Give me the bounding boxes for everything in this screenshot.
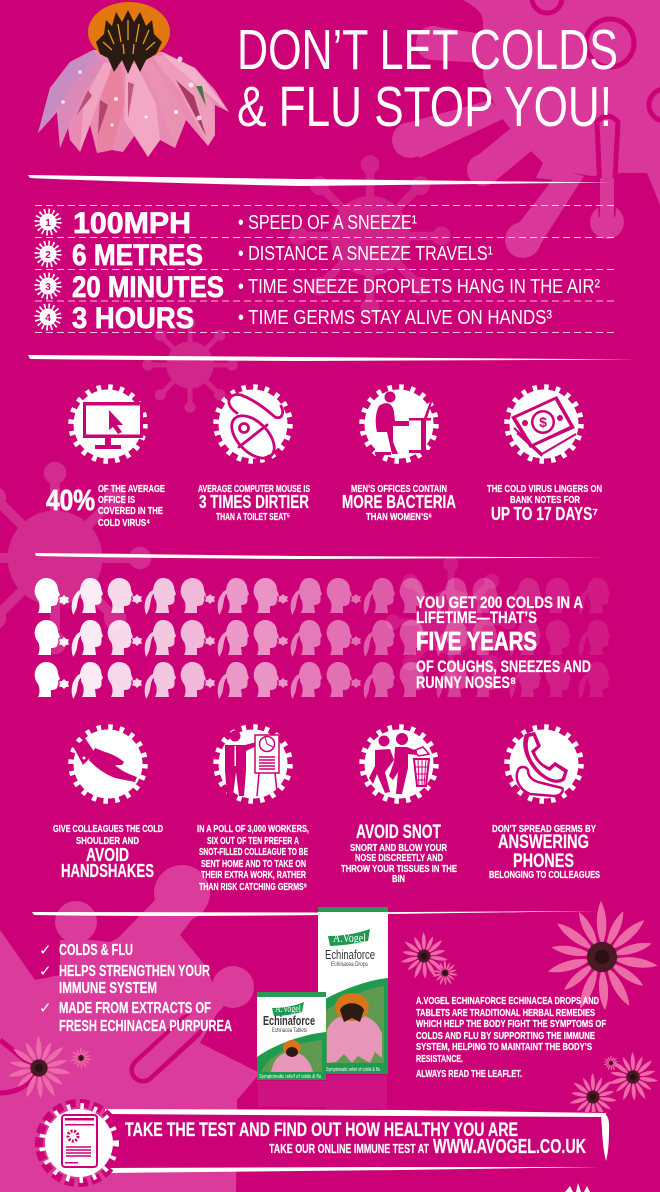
stat: 100mph [37,207,417,240]
hero flower illustration [38,2,229,157]
fact: mouse: THAN A TOILET SEAT⁵ [216,512,290,523]
checklist benefits: ✓ [39,963,52,980]
advice: avoid snot [341,822,457,885]
banner panel [105,1112,605,1168]
flower cone [88,2,170,74]
text: 200 colds in a lifetime: YOU GET 200 COLDS IN A [416,593,583,612]
fact: mouse [198,484,310,523]
fact: bank notes [487,484,602,524]
fact: bank notes: THE COLD VIRUS LINGERS ON [487,484,602,495]
advice: avoid snot: THROW YOUR TISSUES IN THE [341,864,457,875]
product packs [257,907,388,1109]
title [237,18,618,139]
stat: 3 hours [37,302,552,335]
checklist benefits: HELPS STRENGTHEN YOUR [59,963,210,980]
advice: answering phones [489,824,600,881]
advice: poll of workers: SNOT-FILLED COLLEAGUE TO BE [199,847,308,858]
fact: bacteria: THAN WOMEN’S⁶ [366,512,432,523]
large virus top right [392,0,660,258]
rings on top right virus [532,0,660,121]
stat: 20 minutes [37,271,600,304]
fact: bacteria: MEN’S OFFICES CONTAIN [351,484,447,495]
stat: 6 metres [37,239,493,272]
icon: cold shoulder hand [71,727,145,801]
small virus at bottom edge [565,1183,590,1192]
advice: avoid snot: AVOID SNOT [356,822,441,843]
fact: bacteria: MORE BACTERIA [342,492,456,512]
stat: 6 metres: 6 METRES [72,239,203,272]
advice: avoid handshakes [53,824,163,881]
advice: avoid snot: SNORT AND BLOW YOUR [350,843,448,854]
product description: A.VOGEL ECHINAFORCE ECHINACEA DROPS AND [416,996,599,1007]
fact: 40 percent: OF THE AVERAGE [98,484,165,495]
stat: 20 minutes: 20 MINUTES [72,271,224,304]
advice: poll of workers: IN A POLL OF 3,000 WORKERS, [197,824,309,835]
icon: presenter [216,727,290,801]
checklist benefits [39,942,232,1035]
advice: answering phones: DON’T SPREAD GERMS BY [492,824,596,835]
text: 200 colds in a lifetime: LIFETIME—THAT’S [416,608,537,627]
icon: computer monitor [71,387,145,461]
advice: poll of workers: SENT HOME AND TO TAKE ON [201,859,306,870]
fact: mouse: AVERAGE COMPUTER MOUSE IS [198,484,310,495]
fact: 40 percent: OFFICE IS [98,495,135,506]
divider stroke [35,553,606,559]
product: Echinaforce tablets box: Echinaforce [263,1013,315,1028]
product: Echinaforce drops box: Symptomatic relief of colds & flu [326,1067,380,1073]
fact: 40 percent: 40% [46,485,95,517]
checklist benefits: ✓ [39,942,52,959]
stat: 100mph: 1 [45,218,51,229]
decorative echinacea flowers [7,901,658,1120]
product description: TABLETS ARE TRADITIONAL HERBAL REMEDIES [416,1008,595,1019]
icon: phone test badge [39,1103,119,1183]
icon: telephone [507,727,581,801]
product description: ALWAYS READ THE LEAFLET. [416,1069,522,1080]
text: 200 colds in a lifetime: FIVE YEARS [416,626,537,656]
checklist benefits: COLDS & FLU [59,942,133,959]
text: 200 colds in a lifetime: OF COUGHS, SNEEZES AND [416,657,591,676]
icon: computer mouse [216,387,290,466]
advice: avoid handshakes: SHOULDER AND [76,836,139,847]
fact: 40 percent [46,484,165,529]
stat: 100mph: 100MPH [73,207,191,240]
product: Echinaforce tablets box: Echinacea Tablets [272,1028,307,1034]
icon: bank notes: $ [539,414,547,430]
product description: WHICH HELP THE BODY FIGHT THE SYMPTOMS OF [416,1019,606,1030]
product description: RESISTANCE. [416,1054,463,1065]
text: 200 colds in a lifetime: RUNNY NOSES⁸ [416,673,516,692]
fact: bank notes: BANK NOTES FOR [510,495,581,506]
product: Echinaforce drops box [318,907,388,1074]
divider stroke [28,355,637,361]
advice: avoid handshakes: AVOID [86,845,129,865]
stat: 20 minutes: 3 [45,282,51,293]
large virus bottom left [0,865,260,1192]
icon: man at desk [362,387,436,461]
banner subline: TAKE OUR ONLINE IMMUNE TEST AT [269,1141,429,1156]
fact: mouse: 3 TIMES DIRTIER [199,492,309,512]
icon: bank notes [507,387,581,461]
stat: 3 hours: 4 [45,313,51,324]
fact: 40 percent: COLD VIRUS⁴ [98,518,150,529]
advice: avoid handshakes: GIVE COLLEAGUES THE COLD [53,824,163,835]
advice: poll of workers: THAN RISK CATCHING GERMS⁹ [199,882,307,893]
stat: 100mph: • SPEED OF A SNEEZE¹ [238,212,417,234]
call to action banner [39,1103,609,1183]
advice row [53,727,600,893]
stat: 6 metres: • DISTANCE A SNEEZE TRAVELS¹ [238,243,493,265]
icon: person binning tissue [362,727,436,801]
divider stroke [32,911,600,916]
fact: bank notes: UP TO 17 DAYS⁷ [491,504,598,524]
advice: avoid handshakes: HANDSHAKES [61,861,154,881]
product: Echinaforce tablets box: Symptomatic relief of colds & flu [259,1074,321,1080]
checklist benefits: FRESH ECHINACEA PURPUREA [59,1018,232,1035]
text: 200 colds in a lifetime [416,593,591,692]
checklist benefits: ✓ [39,1000,52,1017]
banner url: WWW.AVOGEL.CO.UK [433,1136,586,1158]
pictogram: rows of heads [35,578,610,699]
checklist benefits: IMMUNE SYSTEM [59,980,157,997]
stat: 6 metres: 2 [45,250,51,261]
pack reflection [258,1075,387,1109]
flower petals [38,50,229,157]
advice: poll of workers: THEIR EXTRA WORK, RATHER [201,870,307,881]
stats list [35,206,618,335]
stat: 3 hours: 3 HOURS [72,302,194,335]
fact: bacteria [342,484,456,523]
advice: poll of workers [197,824,309,893]
product: Echinaforce drops box: A.Vogel [333,930,366,945]
advice: answering phones: PHONES [513,851,574,872]
banner brush frame [105,1109,609,1173]
divider stroke [28,175,612,186]
product: Echinaforce drops box: Echinacea Drops [331,962,368,968]
office facts row [46,387,602,529]
advice: poll of workers: SIX OUT OF TEN PREFER A [207,836,299,847]
advice: avoid snot: BIN [392,874,405,885]
product: Echinaforce tablets box: A.Vogel [275,1004,301,1015]
product description: SYSTEM, HELPING TO MAINTAINT THE BODY’S [416,1042,592,1053]
advice: avoid snot: NOSE DISCREETLY AND [355,853,443,864]
product description [416,996,606,1080]
product description: COLDS AND FLU BY SUPPORTING THE IMMUNE [416,1031,595,1042]
banner headline: TAKE THE TEST AND FIND OUT HOW HEALTHY YOU ARE [125,1120,518,1141]
checklist benefits: MADE FROM EXTRACTS OF [59,1000,211,1017]
fact: 40 percent: COVERED IN THE [98,506,163,517]
advice: answering phones: BELONGING TO COLLEAGUES [489,870,600,881]
stat: 3 hours: • TIME GERMS STAY ALIVE ON HANDS³ [238,307,552,329]
advice: answering phones: ANSWERING [498,832,589,853]
product: Echinaforce drops box: Echinaforce [325,947,375,962]
product: Echinaforce tablets box [257,992,326,1080]
